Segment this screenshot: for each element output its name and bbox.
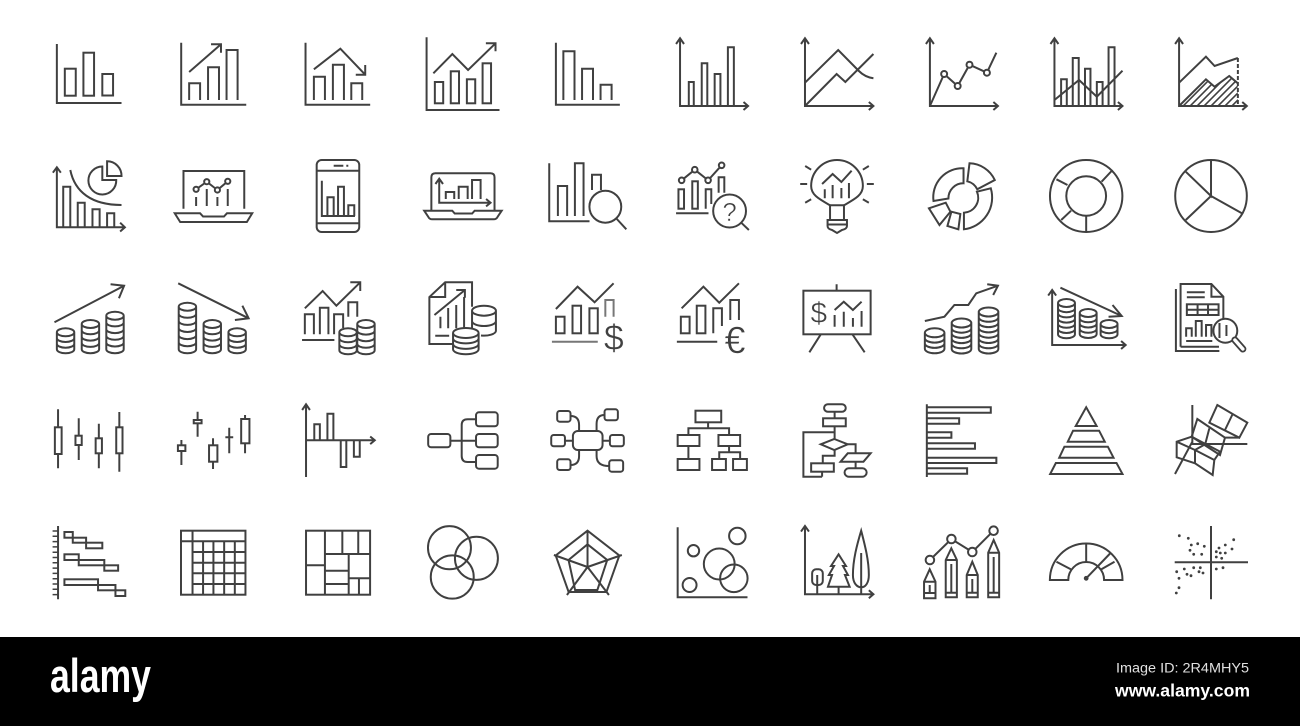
icon: line chart with points xyxy=(926,38,998,110)
icon: chart analysis with question magnifier xyxy=(676,162,749,230)
icon: presentation board xyxy=(803,284,871,352)
icon: candlestick chart xyxy=(55,409,123,472)
image id: Image ID: 2R4MHY5 xyxy=(1116,661,1249,676)
icon: horizontal bar chart xyxy=(927,404,996,477)
icon: light bulb with chart xyxy=(800,160,874,233)
icon: report with magnifier xyxy=(1176,284,1243,351)
icon: scatter plot xyxy=(1175,526,1248,599)
icon: presentation board: $ xyxy=(811,297,827,330)
icon: bar chart xyxy=(57,44,122,103)
icon: org chart xyxy=(678,411,747,470)
icon: pencil bars with line chart xyxy=(924,526,999,598)
icon: falling bars with curve and pie xyxy=(53,161,125,232)
icon: descending bar chart xyxy=(556,43,620,105)
icon: rising bars with arrow xyxy=(181,43,246,105)
icons: left five columns xyxy=(53,37,626,599)
icon: smartphone with bar chart xyxy=(317,160,359,232)
icon: tree diagram xyxy=(428,412,498,469)
icons: right five columns xyxy=(676,38,1266,598)
icon: hatched area chart xyxy=(1174,36,1248,111)
icon: pyramid chart xyxy=(1050,407,1122,474)
icon: gauge meter xyxy=(1050,544,1122,581)
icon: flowchart xyxy=(803,404,871,477)
icon: bars with falling arrow xyxy=(306,43,370,105)
icon: positive and negative bars xyxy=(302,404,375,477)
icon: bars with euro sign xyxy=(677,283,746,362)
icon: gantt chart xyxy=(53,526,125,599)
icon: pie chart xyxy=(1175,160,1247,232)
icon: venn diagram xyxy=(428,526,498,599)
icon: mind map xyxy=(551,409,624,472)
icon: falling coins on axes xyxy=(1048,288,1126,349)
website: www.alamy.com xyxy=(1114,681,1250,701)
icon: chart analysis with question magnifier: ? xyxy=(722,199,737,227)
icon: combo bar and line chart xyxy=(1050,38,1122,110)
icon: market candles xyxy=(178,412,249,469)
footer bar xyxy=(0,637,1300,726)
icon: bar chart with magnifier xyxy=(549,163,626,229)
alamy logo: alamy xyxy=(50,649,151,702)
icon: trees on chart axes xyxy=(801,526,873,598)
icon: perspective cube scatter xyxy=(1175,405,1247,475)
icon: coins with stepped arrow xyxy=(925,284,998,354)
icon: exploded donut chart xyxy=(929,163,995,229)
icon: donut chart xyxy=(1050,160,1122,232)
icon: rising coin stacks with arrow xyxy=(54,284,124,353)
icon: bubble chart xyxy=(678,527,748,597)
icon: axis bar chart xyxy=(676,38,748,110)
icon: document with chart and coins xyxy=(429,282,496,354)
icon: tall coin stack on stepped arrow xyxy=(979,308,998,354)
icon: treemap xyxy=(306,531,370,595)
icon: bars with zigzag growth arrow xyxy=(427,37,499,110)
icon: radar chart xyxy=(554,531,622,595)
icon: bars with euro sign: € xyxy=(725,320,746,362)
icon: bars, growth arrow and coins xyxy=(302,282,375,354)
icon: falling coin stacks with arrow xyxy=(178,283,249,353)
icon: laptop with arrow bar chart xyxy=(424,173,502,219)
icon: laptop with line chart xyxy=(175,171,252,222)
icon: bars with dollar sign: $ xyxy=(604,318,624,358)
icon: bars with dollar sign xyxy=(552,283,624,358)
icon: data table xyxy=(181,531,245,595)
icon: crossing line chart xyxy=(801,38,873,110)
